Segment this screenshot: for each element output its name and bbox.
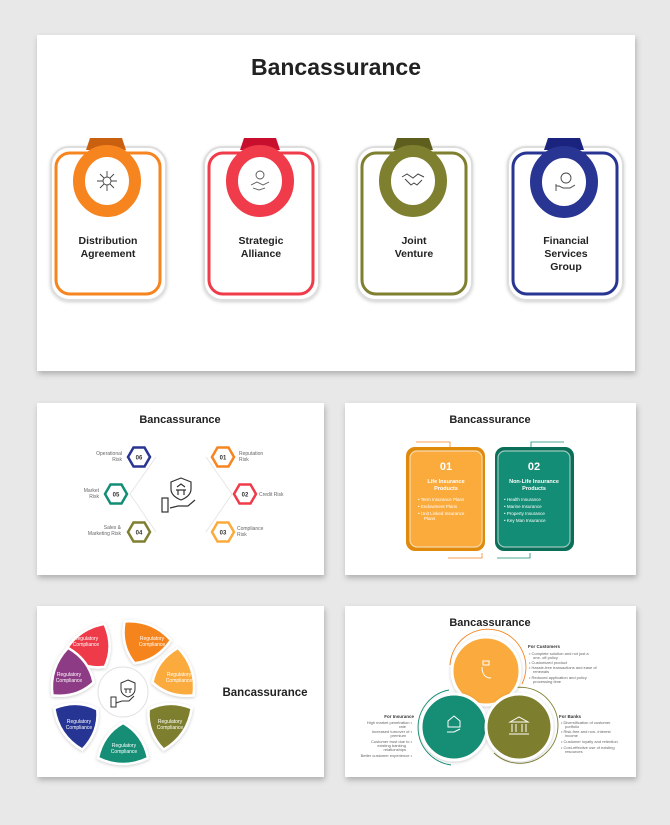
text: for insurance: For Insurance — [384, 714, 414, 719]
card: financial services group: Services — [544, 248, 588, 260]
text: for banks: portfolio — [565, 724, 580, 729]
petal labels: Regulatory — [167, 672, 192, 678]
card: non-life insurance: • Property Insurance — [504, 511, 545, 516]
hexagon 01: 01 — [220, 456, 227, 462]
card: life insurance: Life Insurance — [427, 479, 465, 485]
text: for insurance: Customer trust due to • — [371, 739, 413, 744]
text: for customers: processing time — [533, 679, 562, 684]
hexagon 05: 05 — [113, 492, 120, 498]
hexagon 03: Risk — [237, 532, 247, 538]
text: for customers: • Complete solution and not just a — [529, 651, 589, 656]
card: joint venture: Joint — [401, 235, 427, 247]
petal labels: Compliance — [73, 642, 99, 648]
petal labels: Regulatory — [112, 743, 137, 749]
title: Bancassurance — [222, 687, 308, 699]
hexagon 06: 06 — [136, 456, 143, 462]
text: for banks: • Risk-free and non- interest — [561, 729, 612, 734]
card: non-life insurance: • Health Insurance — [504, 497, 541, 502]
circle: insurance — [421, 694, 487, 760]
panel: risks slide — [37, 403, 324, 575]
text: for insurance: High market penetration • — [367, 720, 413, 725]
text: for insurance: premium — [390, 733, 407, 738]
hexagon 01: Risk — [239, 457, 249, 463]
petal labels: Regulatory — [67, 719, 92, 725]
hexagon 05 — [84, 484, 127, 504]
circle: customers — [452, 637, 520, 705]
petal labels: Compliance — [139, 642, 165, 648]
card: distribution agreement: Distribution — [79, 235, 137, 247]
hexagon 05: Market — [84, 488, 100, 494]
hexagon 03: 03 — [220, 530, 227, 536]
icon: gear handshake — [251, 171, 269, 190]
hexagon 04: Sales & — [104, 525, 122, 531]
text: for insurance: relationships — [384, 747, 406, 752]
hexagon 06 — [96, 448, 150, 466]
hexagon 01 — [212, 448, 263, 466]
text: for customers: • Reduced application and policy — [529, 675, 587, 680]
card: life insurance: • Unit Linked Insurance — [418, 511, 465, 516]
petal labels: Compliance — [111, 749, 137, 755]
hexagon 02: Credit Risk — [259, 492, 284, 498]
text: for customers: renewals — [533, 669, 549, 674]
petal labels: Compliance — [56, 678, 82, 684]
text: for insurance: existing banking — [377, 743, 406, 748]
text: for insurance: Better customer experience • — [361, 753, 413, 758]
card: non-life insurance: Non-Life Insurance — [509, 479, 559, 485]
card: life insurance: • Term Insurance Plans — [418, 497, 465, 502]
panel: products slide — [345, 403, 636, 575]
hexagon 01: Reputation — [239, 451, 263, 457]
hexagon 06: Risk — [112, 457, 122, 463]
text: for customers: For Customers — [528, 644, 561, 649]
panel: risks slide: Bancassurance — [139, 414, 221, 426]
petal labels: Regulatory — [57, 672, 82, 678]
center circle icon — [98, 667, 148, 717]
icon: network — [97, 171, 117, 191]
card: non-life insurance — [495, 442, 574, 558]
petal labels: Regulatory — [74, 636, 99, 642]
text: for insurance — [361, 714, 414, 758]
text: for banks: • Cost-effective use of existing — [561, 745, 615, 750]
text: for insurance: rate — [399, 724, 407, 729]
circle: banks — [486, 694, 552, 760]
icon: hand shield bank — [162, 478, 195, 512]
card: life insurance — [406, 442, 485, 558]
hexagon 03: Compliance — [237, 526, 264, 532]
hexagon 02: 02 — [242, 492, 249, 498]
card: distribution agreement: Agreement — [81, 248, 136, 260]
text: for customers: • Hassle-free transactions and ease of — [529, 665, 598, 670]
arcs — [418, 629, 558, 765]
hexagon 04: 04 — [136, 530, 143, 536]
card: life insurance: Plans — [424, 516, 436, 521]
icon: hand coin — [556, 173, 575, 191]
card: strategic alliance: Alliance — [241, 248, 281, 260]
petal labels — [56, 636, 192, 755]
panel: benefits slide: Bancassurance — [449, 617, 531, 629]
icon: handshake — [402, 174, 424, 185]
text: for banks: • Customer loyalty and retention — [561, 739, 618, 744]
title: Bancassurance — [251, 54, 421, 80]
card: strategic alliance — [204, 138, 319, 300]
hexagon 03 — [212, 522, 264, 542]
panel: main slide — [37, 35, 635, 371]
text: for banks: For Banks — [559, 714, 582, 719]
hexagon 04: Marketing Risk — [88, 531, 121, 537]
text: for customers — [528, 644, 598, 684]
card: non-life insurance: 02 — [528, 461, 540, 473]
card: joint venture — [357, 138, 472, 300]
petal labels: Compliance — [157, 725, 183, 731]
hexagon 02 — [234, 484, 284, 504]
petal labels: Regulatory — [140, 636, 165, 642]
card: life insurance: • Endowment Plans — [418, 504, 458, 509]
card: financial services group — [508, 138, 623, 300]
text: for customers: • Customized product — [529, 660, 568, 665]
text: for banks: • Diversification of customer — [561, 720, 611, 725]
card: non-life insurance: • Marine Insurance — [504, 504, 542, 509]
card: non-life insurance: Products — [522, 486, 546, 492]
card: distribution agreement — [51, 138, 166, 300]
text: for banks: income — [565, 733, 579, 738]
card: financial services group: Group — [550, 261, 582, 273]
text: for customers: one- off policy — [533, 655, 558, 660]
card: life insurance: Products — [434, 486, 458, 492]
card: joint venture: Venture — [395, 248, 433, 260]
petal labels: Regulatory — [158, 719, 183, 725]
petal diagram — [47, 616, 199, 764]
hexagon 05: Risk — [89, 494, 99, 500]
panel: products slide: Bancassurance — [449, 414, 531, 426]
petal labels: Compliance — [66, 725, 92, 731]
hexagon 04 — [88, 522, 150, 542]
text: for insurance: Increased turnover of • — [372, 729, 413, 734]
panel: benefits slide — [345, 606, 636, 777]
text: for banks — [559, 714, 618, 754]
card: financial services group: Financial — [543, 235, 589, 247]
panel: compliance petals slide — [37, 606, 324, 777]
petal labels: Compliance — [166, 678, 192, 684]
hexagon 06: Operational — [96, 451, 122, 457]
text: for banks: resources — [565, 749, 583, 754]
card: life insurance: 01 — [440, 461, 452, 473]
card: strategic alliance: Strategic — [239, 235, 284, 247]
card: non-life insurance: • Key Man Insurance — [504, 518, 546, 523]
